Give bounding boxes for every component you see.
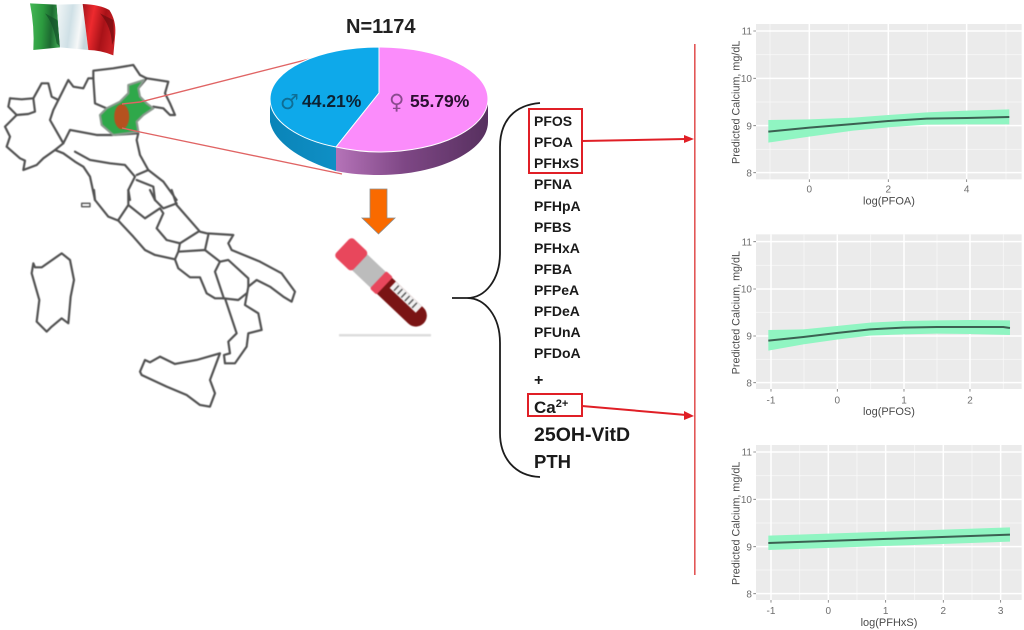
axis ticks: [753, 242, 970, 392]
list: analytes: PFHpA: [534, 198, 581, 214]
x tick labels: [767, 395, 973, 406]
trend line: [768, 535, 1010, 543]
axis ticks: [753, 31, 967, 182]
x axis title: log(PFHxS): [861, 617, 917, 629]
y tick labels: 9: [746, 542, 752, 553]
x tick labels: 2: [967, 395, 973, 406]
y tick labels: 10: [741, 285, 752, 296]
northern regions outline: [5, 65, 177, 200]
arrow: calcium to charts: [582, 406, 694, 420]
brace: [452, 103, 540, 477]
arrow: orange down arrow: [362, 189, 395, 234]
chart: calcium vs log PFOS: [730, 234, 1022, 418]
x tick labels: 1: [901, 395, 907, 406]
label: male percent: 44.21%: [302, 91, 362, 111]
southern regions outline: [32, 190, 295, 407]
y tick labels: 9: [746, 332, 752, 343]
connector lines from map to pie: [122, 53, 342, 174]
confidence band: [768, 527, 1010, 550]
chart: calcium vs log PFOA: [730, 24, 1022, 207]
chart: calcium vs log PFHxS: [730, 445, 1022, 629]
map: Italy regions: [5, 65, 295, 407]
x axis title: log(PFOA): [863, 195, 915, 207]
y tick labels: 11: [742, 237, 752, 248]
label: female percent: [389, 90, 470, 114]
list: analytes: PFDeA: [534, 303, 580, 319]
label: female percent: ♀: [389, 90, 404, 114]
x tick labels: 0: [826, 606, 832, 617]
y tick labels: 8: [746, 378, 752, 389]
y tick labels: 10: [741, 495, 752, 506]
y tick labels: 8: [746, 589, 752, 600]
list: analytes: 2+: [556, 398, 568, 410]
tube body: [334, 237, 433, 333]
island: Sardinia: [32, 253, 74, 332]
list: analytes: PFBA: [534, 261, 572, 277]
confidence band: [768, 320, 1010, 351]
x axis title: log(PFOS): [863, 406, 915, 418]
grid lines: [756, 445, 1022, 600]
region: Veneto highlighted: [100, 80, 153, 135]
x tick labels: -1: [767, 395, 776, 406]
list: analytes: PFOA: [534, 134, 573, 150]
list: analytes: PFDoA: [534, 345, 581, 361]
list: analytes: +: [534, 372, 543, 389]
x tick labels: 3: [998, 606, 1004, 617]
y tick labels: [741, 27, 752, 179]
icon: Italian flag: [30, 3, 115, 55]
y tick labels: [741, 237, 752, 389]
pie side: female: [336, 99, 488, 175]
tube shadow: [339, 334, 431, 336]
y axis title: Predicted Calcium, mg/dL: [730, 41, 742, 164]
y tick labels: 11: [742, 448, 752, 459]
y axis title: Predicted Calcium, mg/dL: [730, 251, 742, 374]
list: analytes: PTH: [534, 451, 571, 472]
island: Sicily: [140, 353, 220, 407]
arrow: PFAS to charts: [582, 135, 694, 143]
x tick labels: [767, 606, 1004, 617]
list: analytes: PFUnA: [534, 324, 581, 340]
grid lines: [756, 24, 1022, 179]
highlight box: calcium: [528, 394, 582, 416]
icon: blood tube: [334, 237, 433, 336]
list: analytes: PFOS: [534, 113, 572, 129]
list: analytes: PFHxA: [534, 240, 580, 256]
study area ellipse: [114, 104, 129, 129]
label: male percent: ♂: [280, 90, 299, 114]
y tick labels: 9: [746, 121, 752, 132]
highlight box: PFOS PFOA PFHxS: [529, 109, 582, 173]
list: analytes: PFBS: [534, 219, 571, 235]
pie chart: sex distribution: [270, 47, 488, 175]
y tick labels: [741, 448, 752, 600]
x tick labels: 4: [964, 185, 970, 196]
pie slice: male: [270, 47, 379, 147]
pie slice: female: [336, 47, 488, 152]
title: N=1174: N=1174: [346, 16, 416, 38]
x tick labels: 2: [886, 185, 892, 196]
list: analytes: [534, 113, 630, 472]
x tick labels: -1: [767, 606, 776, 617]
x tick labels: 2: [941, 606, 947, 617]
x tick labels: 1: [883, 606, 889, 617]
vertical divider line: [694, 44, 696, 575]
grid lines: [756, 234, 1022, 389]
label: female percent: 55.79%: [410, 91, 470, 111]
label: male percent: [280, 90, 362, 114]
plot panel: [756, 24, 1022, 179]
plot panel: [756, 445, 1022, 600]
y axis title: Predicted Calcium, mg/dL: [730, 462, 742, 585]
confidence band: [768, 109, 1009, 143]
list: analytes: 25OH-VitD: [534, 424, 630, 446]
axis ticks: [753, 452, 1001, 603]
pie side: male: [270, 99, 336, 171]
list: analytes: PFHxS: [534, 155, 579, 171]
trend line: [768, 117, 1009, 132]
y tick labels: 8: [746, 168, 752, 179]
y tick labels: 11: [742, 27, 752, 38]
trend line: [768, 327, 1010, 341]
x tick labels: [807, 185, 970, 196]
list: analytes: PFNA: [534, 176, 572, 192]
x tick labels: 0: [835, 395, 841, 406]
x tick labels: 0: [807, 185, 813, 196]
y tick labels: 10: [741, 74, 752, 85]
list: analytes: Ca: [534, 398, 556, 417]
list: analytes: PFPeA: [534, 282, 579, 298]
plot panel: [756, 234, 1022, 389]
